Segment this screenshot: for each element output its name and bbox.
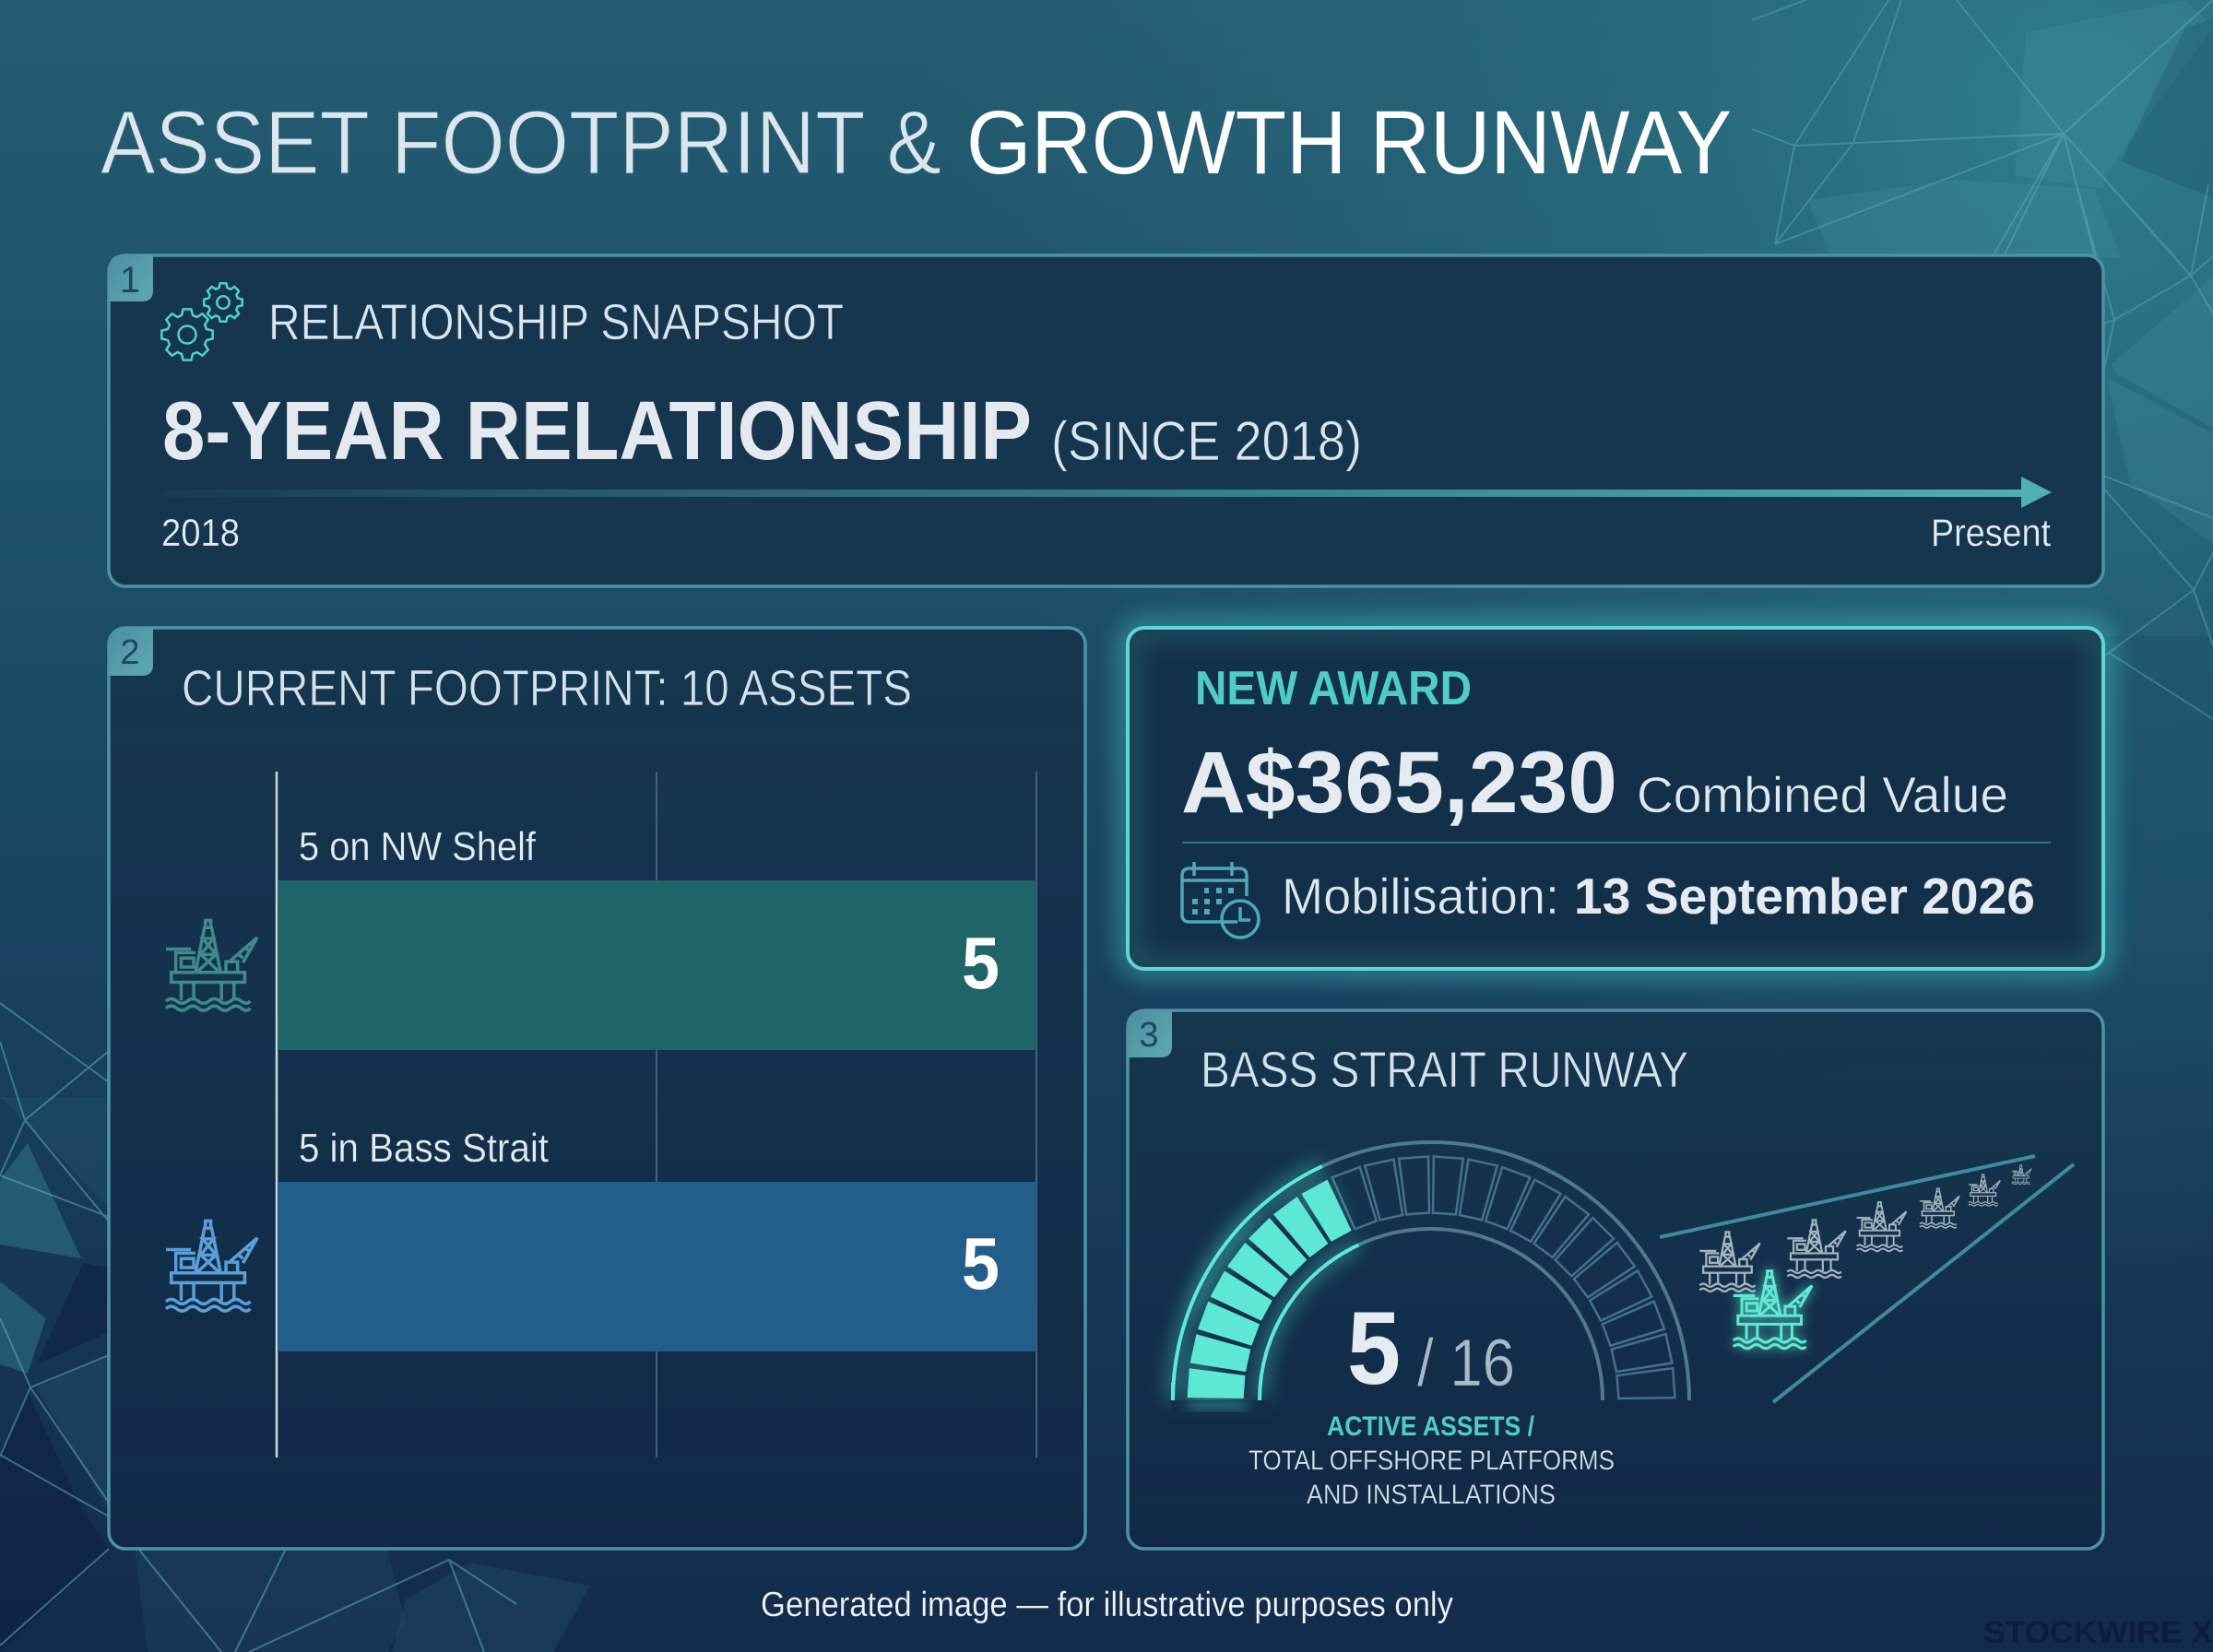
bar: Bass Strait: 5 — [962, 1222, 1000, 1304]
icon: rig Bass Strait — [166, 1221, 257, 1311]
heading: relationship snapshot: RELATIONSHIP SNAPSHOT — [268, 293, 844, 350]
icon: gears — [161, 283, 243, 360]
arrow: timeline — [162, 477, 2052, 508]
icons: distant rigs — [1699, 1164, 2031, 1292]
heading: bass strait runway: BASS STRAIT RUNWAY — [1201, 1041, 1688, 1098]
gauge caption: ACTIVE ASSETS / — [1327, 1411, 1535, 1442]
title — [101, 92, 1732, 193]
bar chart — [277, 772, 1036, 1457]
bar: Bass Strait — [278, 1126, 1036, 1351]
mobilisation date: Mobilisation: — [1282, 867, 1559, 925]
title: ASSET FOOTPRINT & — [101, 92, 941, 193]
gauge value: 5 / 16 — [1347, 1291, 1515, 1406]
perspective runway lines — [1660, 1156, 2074, 1402]
badge 1 — [109, 254, 153, 301]
bar: NW Shelf — [278, 824, 1036, 1050]
value: A$365,230 — [1181, 734, 2008, 832]
badge 3 — [1128, 1010, 1172, 1057]
panel: current footprint — [109, 628, 1085, 1549]
value: A$365,230: A$365,230 — [1181, 734, 1617, 832]
panel: bass strait runway — [1128, 1010, 2103, 1549]
gauge caption: AND INSTALLATIONS — [1307, 1480, 1556, 1510]
headline: 8-year relationship: 8-YEAR RELATIONSHIP — [162, 385, 1032, 478]
gauge caption: TOTAL OFFSHORE PLATFORMS — [1249, 1446, 1615, 1476]
badge 1: 1 — [120, 260, 140, 301]
mobilisation date — [1282, 867, 2035, 925]
heading: new award: NEW AWARD — [1195, 662, 1472, 715]
gauge caption — [1249, 1411, 1615, 1510]
bar: Bass Strait: 5 in Bass Strait — [299, 1126, 549, 1171]
badge 2 — [109, 628, 153, 676]
panel: new award — [1128, 628, 2103, 969]
panel: relationship snapshot — [109, 254, 2103, 586]
icon: calendar — [1182, 862, 1259, 938]
gauge — [1171, 1142, 1689, 1419]
headline: 8-year relationship: (SINCE 2018) — [1051, 410, 1362, 472]
bar: NW Shelf: 5 — [962, 922, 1000, 1004]
gauge value: 5 / 16: / 16 — [1417, 1327, 1515, 1400]
icon: active glowing rig — [1734, 1271, 1812, 1349]
footer disclaimer: Generated image — for illustrative purposes only — [761, 1586, 1453, 1624]
title: GROWTH RUNWAY — [966, 92, 1732, 193]
heading: current footprint: CURRENT FOOTPRINT: 10 ASSETS — [182, 659, 912, 716]
gauge value: 5 / 16: 5 — [1347, 1291, 1401, 1406]
label: present: Present — [1931, 511, 2051, 554]
badge 3: 3 — [1139, 1016, 1159, 1055]
bar: NW Shelf: 5 on NW Shelf — [299, 824, 537, 869]
label: 2018: 2018 — [161, 511, 240, 554]
mobilisation date: 13 September 2026 — [1574, 867, 2035, 925]
badge 2: 2 — [120, 633, 140, 672]
value: A$365,230: Combined Value — [1637, 766, 2008, 823]
watermark: STOCKWIRE X — [1983, 1615, 2213, 1650]
icon: rig NW Shelf — [166, 920, 257, 1010]
